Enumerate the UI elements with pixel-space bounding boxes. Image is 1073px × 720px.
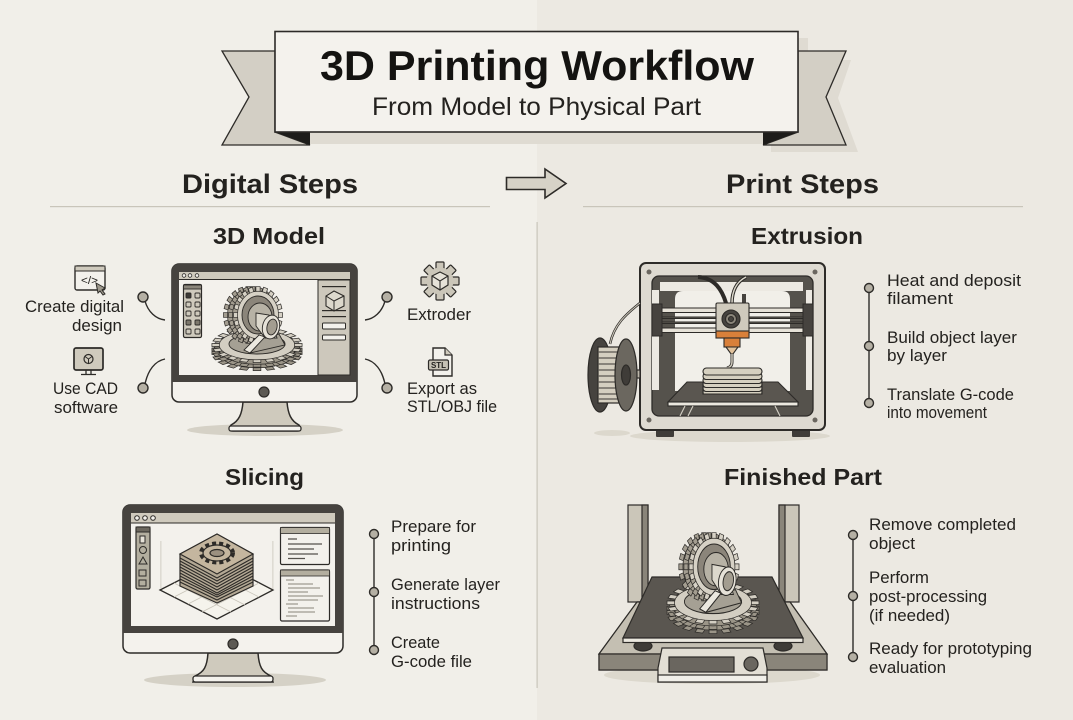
label: use CAD software (53, 379, 118, 417)
list: extrusion steps (887, 271, 1021, 422)
list: slicing steps: instructions (391, 594, 480, 613)
connector: top left (138, 292, 165, 320)
connector: bottom right (365, 359, 392, 393)
3D printer illustration (588, 263, 830, 442)
monitor: slicing (123, 505, 343, 687)
control box (658, 648, 767, 682)
list: extrusion steps: filament (887, 289, 953, 308)
label: export as STL/OBJ file: STL/OBJ file (407, 397, 497, 416)
print bed (623, 577, 803, 642)
build plate grid (160, 541, 273, 619)
banner shadow (310, 38, 858, 152)
G-code window (280, 570, 330, 621)
right ribbon fold (763, 132, 798, 145)
list: extrusion steps: Build object layer (887, 328, 1017, 347)
label: create digital design: Create digital (25, 297, 124, 316)
properties side panel (318, 280, 350, 375)
panel: 3D model (25, 223, 497, 436)
bullet rail: finished part (848, 530, 858, 662)
heading: 3D Model: 3D Model (213, 223, 325, 249)
list: finished part steps: Perform (869, 568, 929, 587)
list: extrusion steps: by layer (887, 346, 947, 365)
bullet rail: slicing (370, 530, 378, 654)
list: extrusion steps: into movement (887, 403, 987, 422)
left ribbon fold (275, 132, 310, 145)
list: extrusion steps: Heat and deposit (887, 271, 1021, 290)
icon: gear with cube (421, 262, 459, 300)
list: slicing steps: printing (391, 536, 451, 555)
extruder head (716, 303, 749, 368)
subtitle: From Model to Physical Part (372, 93, 701, 121)
label: export as STL/OBJ file: Export as (407, 379, 477, 398)
tool palette (136, 527, 150, 589)
panel: slicing (123, 464, 500, 687)
label: create digital design (25, 297, 124, 335)
connector: top right (365, 292, 392, 320)
sliced layer stack (180, 534, 253, 603)
layer list window (280, 528, 330, 564)
list: slicing steps (391, 517, 500, 671)
label: create digital design: design (72, 316, 122, 335)
tool palette (184, 284, 202, 338)
gear part (652, 527, 770, 641)
list: slicing steps: G-code file (391, 652, 472, 671)
bullet rail: extrusion (864, 284, 874, 408)
filament spool (588, 303, 640, 412)
panel: finished part (599, 464, 1032, 684)
left ribbon tail (222, 51, 310, 145)
list: finished part steps: Remove completed (869, 515, 1016, 534)
monitor: 3D model (172, 264, 357, 436)
label: use CAD software: Use CAD (53, 379, 118, 398)
icon: STL file (428, 348, 452, 376)
icon: code window: </> (81, 275, 98, 287)
list: finished part steps: Ready for prototyping (869, 639, 1032, 658)
icon: STL file: STL (431, 361, 446, 370)
list: slicing steps: Create (391, 633, 440, 652)
gantry rails (652, 304, 813, 336)
printer frame (640, 263, 825, 430)
list: finished part steps: (if needed) (869, 606, 950, 625)
arrow: digital to print (506, 169, 566, 198)
banner panel (275, 32, 798, 132)
label: use CAD software: software (54, 398, 118, 417)
list: slicing steps: Prepare for (391, 517, 476, 536)
gear model (198, 282, 312, 377)
printed object (703, 368, 762, 396)
connector: bottom left (138, 359, 165, 393)
heading: finished part: Finished Part (724, 464, 882, 490)
heading: print steps: Print Steps (726, 169, 879, 199)
heading: digital steps: Digital Steps (182, 169, 358, 199)
label: extroder: Extroder (407, 305, 471, 324)
icon: code window (75, 266, 105, 295)
label: export as STL/OBJ file (407, 379, 497, 416)
list: finished part steps (869, 515, 1032, 677)
list: extrusion steps: Translate G-code (887, 385, 1014, 404)
heading: slicing: Slicing (225, 464, 304, 490)
printer base (599, 602, 827, 670)
title: 3D Printing Workflow (320, 42, 754, 89)
cables (698, 277, 746, 303)
list: finished part steps: object (869, 534, 915, 553)
printer columns (628, 505, 799, 602)
list: slicing steps: Generate layer (391, 575, 500, 594)
print bed (668, 382, 798, 416)
finished part illustration (599, 505, 827, 684)
panel: extrusion (588, 223, 1021, 442)
right ribbon tail (763, 51, 846, 145)
heading: extrusion: Extrusion (751, 223, 863, 249)
list: finished part steps: post-processing (869, 587, 987, 606)
icon: CAD monitor (74, 348, 103, 374)
list: finished part steps: evaluation (869, 658, 946, 677)
title banner (222, 32, 858, 152)
